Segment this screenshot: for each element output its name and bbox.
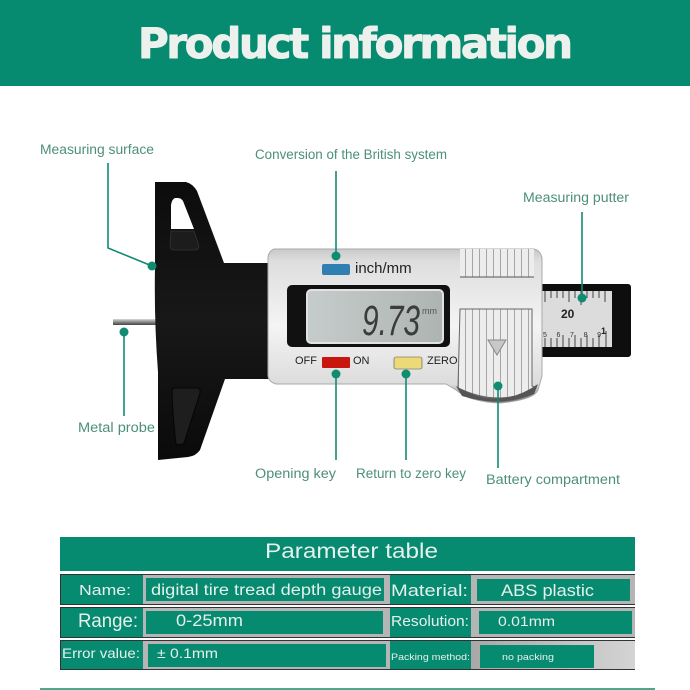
callout: battery compartment [486, 382, 620, 487]
row: range and resolution: 0.01mm [498, 613, 555, 629]
probe [113, 319, 157, 325]
on label: ON [353, 355, 370, 367]
title: Product information [138, 19, 573, 68]
row: error value and packing method: Error value: [62, 645, 140, 661]
table heading: Parameter table [265, 540, 438, 563]
row: error value and packing method [60, 640, 635, 670]
callout: measuring putter [523, 190, 630, 302]
row: name and material: Name: [79, 582, 131, 599]
row: name and material [60, 574, 635, 604]
silver body [268, 249, 542, 403]
lower ribbed grip [458, 309, 536, 398]
row: range and resolution: Resolution: [391, 613, 469, 630]
callout: measuring surface: Measuring surface [40, 142, 154, 157]
row: error value and packing method: Packing method: [391, 652, 470, 663]
lower grip recess [172, 388, 200, 445]
upper grip recess [170, 231, 199, 250]
callout: conversion of the British system: Conversion of the British system [255, 147, 447, 162]
row: error value and packing method: ± 0.1mm [157, 645, 218, 661]
zero label: ZERO [427, 355, 458, 367]
callout: measuring putter: Measuring putter [523, 190, 630, 205]
table heading [60, 537, 635, 571]
row: error value and packing method: no packing [502, 652, 554, 663]
measuring rod: 5 6 7 8 9 [543, 332, 601, 339]
scalloped grip edge [456, 384, 538, 402]
LCD display: mm [422, 306, 437, 316]
product image: tire tread depth gauge [113, 182, 631, 460]
row: name and material: ABS plastic [501, 581, 595, 600]
header banner [0, 0, 690, 86]
battery arrow mark [488, 340, 506, 355]
blue button [322, 264, 350, 275]
measuring rod [540, 284, 631, 357]
callout: opening key: Opening key [255, 466, 336, 481]
black head [155, 182, 270, 460]
LCD display [287, 285, 450, 347]
callout: battery compartment: Battery compartment [486, 472, 620, 487]
upper ribbed grip [460, 249, 534, 277]
row: name and material: digital tire tread depth gauge [151, 582, 382, 599]
row: range and resolution [60, 608, 635, 638]
parameter table [60, 537, 635, 670]
inch/mm label: inch/mm [355, 260, 412, 277]
row: name and material: Material: [391, 581, 468, 600]
row: range and resolution: 0-25mm [176, 611, 243, 630]
callout: opening key [255, 370, 340, 481]
callout: conversion of the British system [255, 147, 447, 260]
callout: measuring surface [40, 142, 156, 270]
callout: return to zero key: Return to zero key [356, 466, 466, 481]
callout: return to zero key [356, 370, 466, 481]
red button [322, 357, 350, 368]
callout: metal probe [78, 328, 155, 435]
LCD display: 9.73 [362, 297, 420, 345]
row: range and resolution: Range: [78, 611, 138, 632]
off label: OFF [295, 355, 317, 367]
measuring rod: 20 [561, 307, 575, 321]
measuring rod: 1 [601, 326, 606, 336]
yellow button [394, 357, 422, 369]
callout: metal probe: Metal probe [78, 420, 155, 435]
